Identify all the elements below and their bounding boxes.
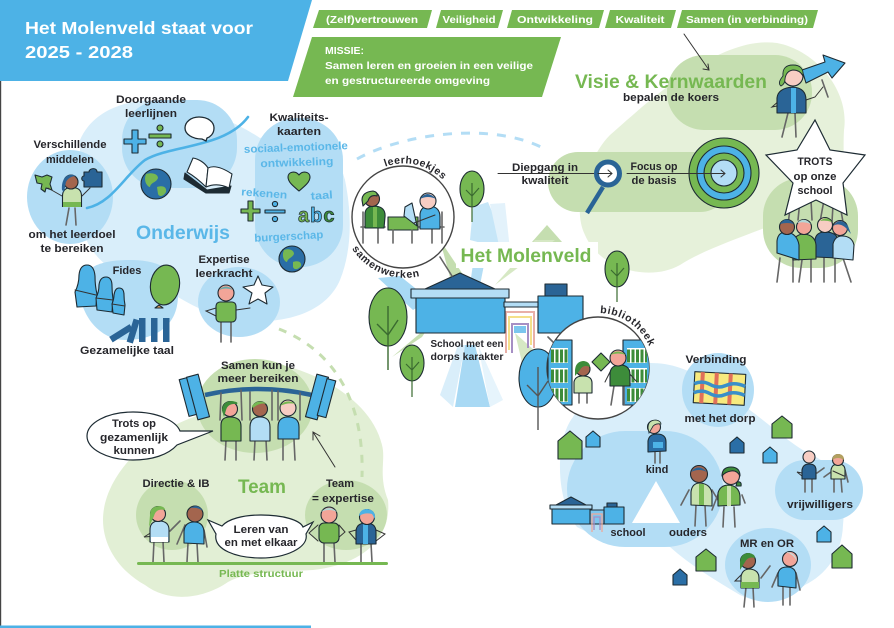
tree — [460, 171, 484, 222]
icon: speech bubble — [185, 117, 214, 141]
person: mr — [735, 553, 770, 607]
label team expertise — [312, 478, 374, 505]
core values tags: Samen (in verbinding) — [686, 14, 808, 26]
kwaliteitskaarten topics: burgerschap — [254, 229, 324, 245]
connector lines — [440, 257, 556, 345]
houses — [558, 416, 852, 585]
group of people under star — [777, 200, 854, 282]
speech bubble leren van en met elkaar: en met elkaar — [224, 537, 298, 549]
curved text bibliotheek: bibliotheek — [600, 305, 654, 346]
label directie en ib: Directie & IB — [142, 478, 210, 490]
star trots op onze school: TROTS — [798, 156, 832, 168]
label verschillende middelen: middelen — [46, 154, 94, 166]
curved text leerhoekjes: leerhoekjes — [384, 156, 446, 179]
icon: domino bars — [109, 318, 170, 343]
label team expertise: = expertise — [312, 493, 374, 505]
star trots op onze school: op onze — [794, 171, 836, 183]
label gezamelijke taal: Gezamelijke taal — [80, 345, 174, 357]
label diepgang in kwaliteit: kwaliteit — [522, 175, 569, 187]
icon: globe — [141, 169, 171, 199]
tree — [605, 251, 629, 302]
ground line — [137, 562, 388, 565]
label diepgang in kwaliteit — [512, 162, 578, 187]
mission panel: MISSIE: — [325, 45, 364, 57]
label focus op de basis: de basis — [632, 175, 676, 187]
label verbinding: Verbinding — [686, 354, 746, 366]
person: vrijwilliger 1 — [797, 451, 824, 492]
label school met een dorps karakter: School met een — [430, 339, 504, 350]
person: vrijwilliger 2 — [824, 454, 848, 492]
label expertise leerkracht — [196, 254, 253, 280]
icon: plus and divide — [241, 201, 285, 222]
person: or — [772, 552, 800, 605]
tree — [400, 345, 424, 397]
icon: abc letters: abc — [298, 205, 335, 227]
star trots op onze school: school — [798, 185, 832, 197]
label verschillende middelen — [34, 139, 106, 166]
tree — [369, 288, 407, 370]
label vrijwilligers: vrijwilligers — [787, 499, 853, 511]
icon: plus and divide — [124, 125, 171, 153]
person: lifter 3 — [278, 391, 300, 460]
person: directeur — [144, 506, 180, 562]
label school met een dorps karakter: dorps karakter — [430, 352, 504, 363]
curved text samenwerken: samenwerken — [352, 246, 419, 278]
person with signpost arrow — [772, 55, 845, 137]
barbell — [179, 374, 336, 420]
panel: school centrum — [351, 156, 654, 430]
icon: puzzle pieces — [35, 169, 102, 192]
label om het leerdoel: te bereiken — [40, 243, 104, 255]
person: leerling — [48, 175, 90, 225]
kwaliteitskaarten topics: rekenen — [241, 186, 288, 202]
label focus op de basis — [630, 161, 678, 187]
label samen kun je meer bereiken — [218, 360, 299, 385]
label doorgaande leerlijnen: leerlijnen — [125, 108, 177, 120]
label kwaliteitskaarten: kaarten — [277, 126, 321, 138]
heading onderwijs: Onderwijs — [136, 223, 230, 244]
icon: target — [689, 138, 759, 208]
tree blue — [519, 349, 557, 430]
icon: heart — [288, 172, 310, 191]
label fides: Fides — [113, 265, 141, 277]
speech bubble trots: gezamenlijk — [100, 432, 169, 444]
label om het leerdoel — [28, 229, 116, 255]
icon: star — [243, 276, 273, 304]
person: expert 1 — [309, 507, 345, 562]
kwaliteitskaarten topics — [241, 140, 348, 245]
core values tags: Veiligheid — [442, 14, 496, 26]
kwaliteitskaarten topics: taal — [310, 189, 333, 203]
mission panel — [293, 37, 561, 97]
speech bubble trots: kunnen — [114, 445, 155, 457]
label platte structuur: Platte structuur — [219, 568, 303, 580]
star trots op onze school — [766, 120, 865, 215]
speech bubble trots: Trots op — [112, 418, 156, 430]
target arrow line — [627, 170, 725, 177]
mission panel: Samen leren en groeien in een veilige — [325, 60, 533, 72]
heading team: Team — [238, 477, 286, 498]
building — [411, 273, 583, 333]
icon: open book — [184, 158, 232, 193]
label samen kun je meer bereiken: meer bereiken — [218, 373, 299, 385]
sun rays — [378, 202, 562, 407]
label verschillende middelen: Verschillende — [34, 139, 106, 151]
small school — [550, 497, 624, 532]
label samen kun je meer bereiken: Samen kun je — [221, 360, 295, 372]
panel: visie en kernwaarden — [498, 34, 865, 282]
dashed arc green — [279, 329, 362, 477]
label ouders: ouders — [669, 527, 707, 539]
label school met een dorps karakter — [430, 339, 504, 363]
label doorgaande leerlijnen — [116, 94, 186, 120]
person: ib — [177, 506, 207, 562]
arrow from samen — [684, 34, 709, 70]
arrow — [313, 432, 335, 467]
heading visie en kernwaarden: Visie & Kernwaarden — [575, 72, 767, 93]
speech bubble trots — [87, 412, 213, 460]
header banner — [0, 0, 312, 81]
panel: team — [87, 359, 388, 597]
mission panel: en gestructureerde omgeving — [325, 75, 490, 87]
circle: bibliotheek — [547, 317, 650, 419]
label kwaliteitskaarten — [270, 112, 329, 138]
icon: flag — [693, 372, 746, 405]
label diepgang in kwaliteit: Diepgang in — [512, 162, 578, 174]
circle: leerhoekjes — [352, 166, 454, 268]
panel: gemeenschap — [550, 353, 863, 607]
core values tags: Kwaliteit — [616, 14, 665, 26]
core values tags — [313, 10, 818, 28]
panel: onderwijs — [27, 94, 350, 357]
kwaliteitskaarten topics: sociaal-emotionele — [244, 140, 348, 156]
label team expertise: Team — [326, 478, 354, 490]
heading het molenveld: Het Molenveld — [460, 246, 592, 267]
person: lifter 2 — [250, 390, 272, 460]
title: Het Molenveld staat voor — [25, 18, 253, 38]
speech bubble leren van en met elkaar — [208, 515, 313, 558]
label expertise leerkracht: leerkracht — [196, 268, 253, 280]
person: expert 2 — [349, 509, 385, 562]
label school: school — [610, 527, 646, 539]
rainbow arches — [506, 312, 534, 353]
label focus op de basis: Focus op — [630, 161, 678, 173]
icon: balloon — [148, 263, 182, 308]
label met het dorp: met het dorp — [684, 413, 756, 425]
line through magnifier — [498, 170, 612, 177]
core values tags: Ontwikkeling — [517, 14, 593, 26]
icon: globe small — [279, 246, 305, 272]
person: leerkracht — [206, 285, 250, 342]
kwaliteitskaarten topics: ontwikkeling — [260, 156, 334, 170]
icon: matryoshka dolls — [75, 265, 125, 315]
subheading bepalen de koers: bepalen de koers — [623, 92, 719, 104]
label doorgaande leerlijnen: Doorgaande — [116, 94, 186, 106]
core values tags: (Zelf)vertrouwen — [326, 14, 418, 26]
white triangle — [632, 481, 680, 523]
label mr en or: MR en OR — [740, 538, 794, 550]
dashed arc blue — [357, 133, 545, 159]
label kind: kind — [646, 464, 668, 476]
person: lifter 1 — [220, 390, 242, 460]
person: ouder 2 — [712, 467, 745, 527]
label om het leerdoel: om het leerdoel — [28, 229, 116, 241]
bottom accent line — [0, 626, 311, 628]
curve line — [87, 117, 248, 208]
person: ouder 1 — [681, 466, 718, 526]
label expertise leerkracht: Expertise — [198, 254, 250, 266]
icon: magnifier — [587, 162, 620, 213]
speech bubble leren van en met elkaar: Leren van — [234, 524, 289, 536]
label kwaliteitskaarten: Kwaliteits- — [270, 112, 329, 124]
title years: 2025 - 2028 — [25, 42, 133, 62]
person: kind — [648, 420, 666, 463]
